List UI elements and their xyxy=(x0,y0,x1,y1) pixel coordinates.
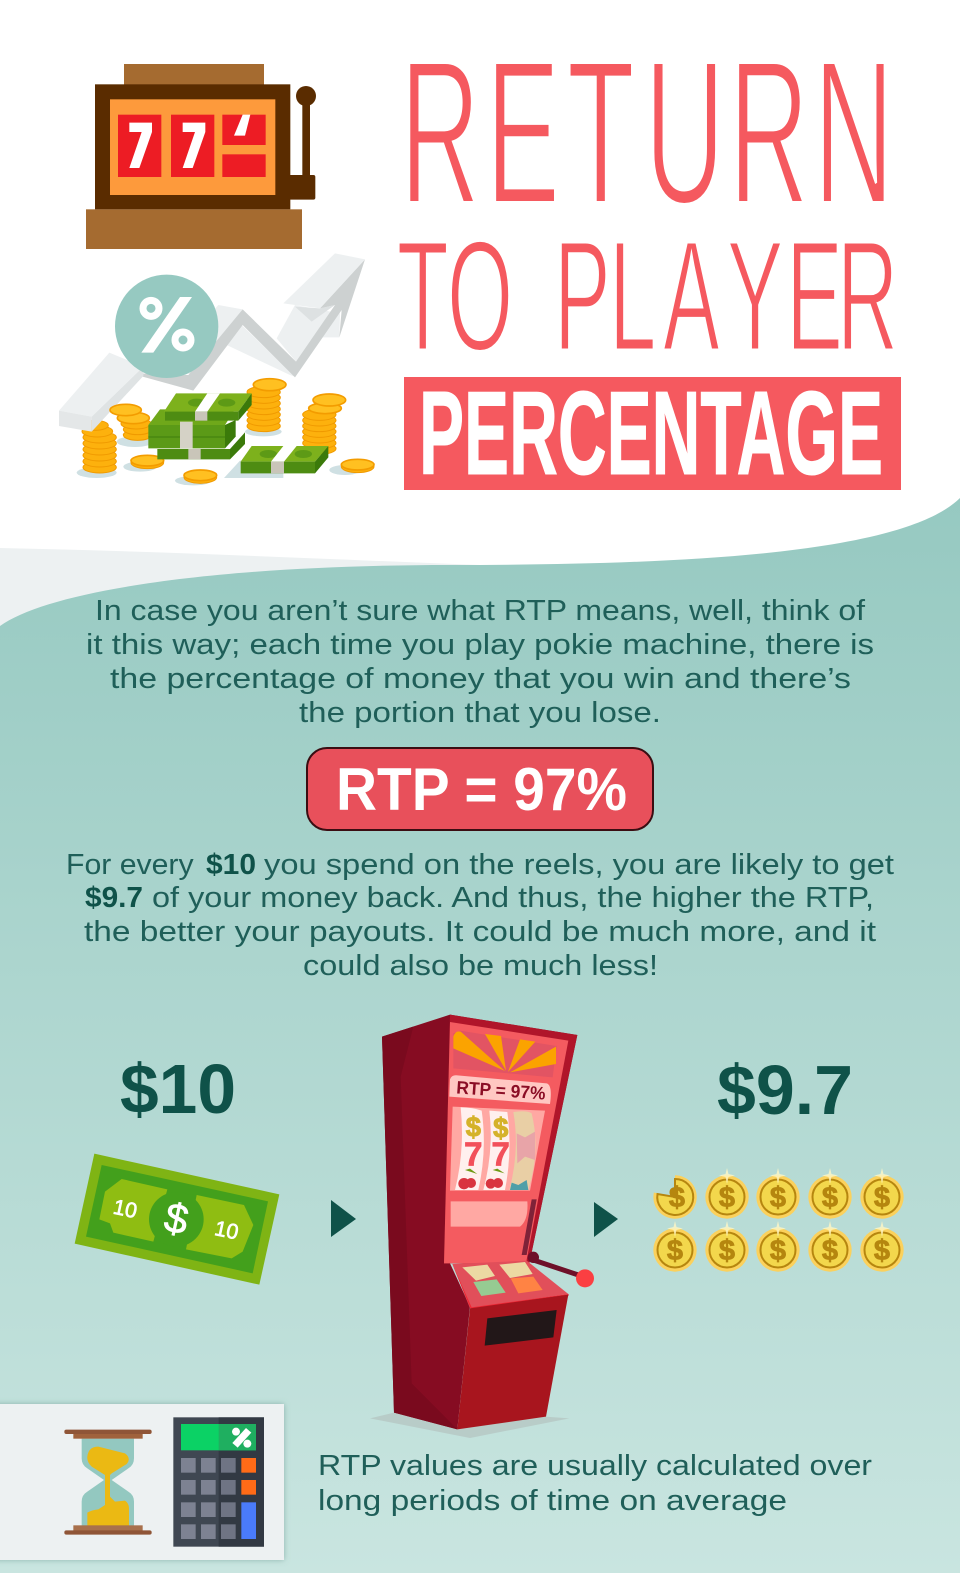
icon: ten dollar bill: 10 xyxy=(212,1216,241,1245)
footnote text: RTP values are usually calculated over xyxy=(318,1450,872,1482)
explanation paragraph: you spend on the reels, you are likely to get xyxy=(264,849,894,881)
icon: hourglass xyxy=(64,1430,152,1535)
intro paragraph: it this way; each time you play pokie machine, there is xyxy=(86,629,874,661)
coin: $ xyxy=(874,1235,890,1267)
icon: top slot machine xyxy=(86,64,316,249)
percent badge xyxy=(115,275,218,378)
coin xyxy=(860,1221,904,1272)
icon: gold coins xyxy=(653,1168,904,1272)
coin stacks xyxy=(110,379,374,483)
coin xyxy=(756,1168,800,1219)
icon: ten dollar bill: 10 xyxy=(111,1195,139,1223)
icon: ten dollar bill xyxy=(75,1154,279,1285)
intro paragraph: In case you aren’t sure what RTP means, well, think of xyxy=(95,595,866,627)
explanation paragraph: For every xyxy=(66,849,202,881)
explanation paragraph xyxy=(66,849,894,982)
icon: arcade slot machine: RTP = 97% xyxy=(456,1077,546,1104)
title line: TO PLAYER: TO PLAYER xyxy=(397,208,898,384)
explanation paragraph: the better your payouts. It could be much more, and it xyxy=(84,916,876,948)
coin: $ xyxy=(770,1182,786,1214)
coin: $ xyxy=(667,1235,683,1267)
panel: time and calculator icons xyxy=(0,1404,284,1560)
explanation paragraph: could also be much less! xyxy=(303,950,658,982)
coin: $ xyxy=(822,1235,838,1267)
coin xyxy=(756,1221,800,1272)
footnote text: long periods of time on average xyxy=(318,1485,787,1517)
cash bundles xyxy=(148,393,328,473)
coin xyxy=(705,1168,749,1219)
title xyxy=(397,18,901,500)
intro paragraph: the percentage of money that you win and there’s xyxy=(110,663,851,695)
coin: $ xyxy=(719,1235,735,1267)
explanation paragraph: $10 xyxy=(206,849,256,881)
icon: arcade slot machine xyxy=(370,1015,594,1438)
icon: rising arrow with coins and cash xyxy=(59,253,374,485)
intro paragraph: the portion that you lose. xyxy=(299,697,661,729)
icon: arcade slot machine: $ xyxy=(493,1112,508,1143)
coin xyxy=(705,1221,749,1272)
coin xyxy=(860,1168,904,1219)
explanation paragraph: of your money back. And thus, the higher the RTP, xyxy=(152,882,874,914)
arrow: out of machine xyxy=(594,1202,618,1237)
RTP formula pill: RTP = 97% xyxy=(336,756,627,823)
amount out: $9.7: $9.7 xyxy=(717,1051,853,1129)
amount in: $10: $10 xyxy=(120,1050,236,1128)
icon: arcade slot machine: 7 xyxy=(491,1136,510,1173)
icon: calculator xyxy=(173,1417,264,1547)
ground shadows xyxy=(77,427,361,485)
intro paragraph xyxy=(86,595,874,729)
coin xyxy=(808,1168,852,1219)
coin xyxy=(808,1221,852,1272)
icon: ten dollar bill: $ xyxy=(160,1194,193,1244)
icon: arcade slot machine: 7 xyxy=(464,1136,483,1173)
title line: RETURN: RETURN xyxy=(400,18,894,247)
teal wave background xyxy=(0,498,960,1573)
arrow: into machine xyxy=(331,1200,356,1237)
rising arrow xyxy=(59,253,365,432)
footnote text xyxy=(318,1450,872,1517)
coin: $ xyxy=(822,1182,838,1214)
coin xyxy=(653,1221,697,1272)
coin stack left xyxy=(82,420,116,473)
icon: arcade slot machine: $ xyxy=(466,1112,481,1143)
coin: $ xyxy=(719,1182,735,1214)
coin: $ xyxy=(874,1182,890,1214)
explanation paragraph: $9.7 xyxy=(85,882,143,914)
partly eaten coin: $ xyxy=(669,1182,685,1214)
partly eaten coin xyxy=(653,1175,697,1219)
coin: $ xyxy=(770,1235,786,1267)
